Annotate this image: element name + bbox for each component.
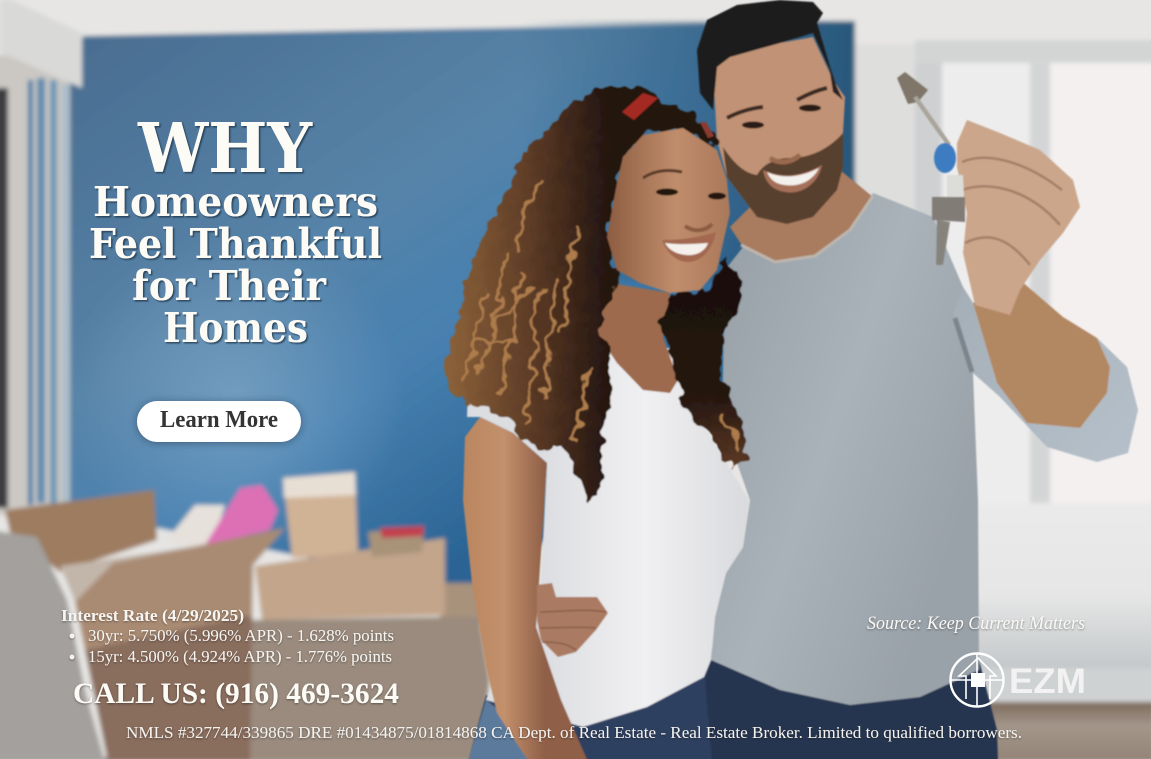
man hand on waist bbox=[537, 583, 608, 657]
woman shirt bbox=[467, 340, 749, 727]
open box inside bbox=[60, 545, 205, 602]
man forearm bbox=[973, 280, 1110, 428]
open box flap bbox=[75, 528, 285, 759]
red band right end bbox=[700, 122, 714, 138]
man bbox=[697, 0, 1138, 759]
man hair bbox=[697, 0, 833, 110]
man face bbox=[713, 37, 845, 223]
button label: Learn More bbox=[160, 407, 278, 433]
man collar bbox=[741, 196, 873, 262]
sofa surface bbox=[100, 617, 490, 759]
man sleeve bbox=[953, 287, 1138, 462]
man teeth bbox=[767, 168, 819, 185]
interest rate block bbox=[61, 606, 394, 666]
source credit: Source: Keep Current Matters bbox=[867, 614, 1085, 634]
man eyes and brows bbox=[727, 88, 827, 128]
woman eyes and brows bbox=[643, 170, 726, 200]
headline line 2: Feel Thankful bbox=[89, 220, 382, 268]
man mouth bbox=[763, 165, 822, 193]
rear cardboard box bbox=[5, 490, 157, 572]
woman arm bbox=[463, 417, 588, 759]
headline line 4: Homes bbox=[163, 304, 308, 352]
moving boxes bbox=[0, 472, 490, 759]
floor behind boxes bbox=[440, 583, 490, 623]
wall light glow bbox=[65, 230, 405, 570]
bullet 30 year bbox=[70, 634, 74, 638]
blue wall bbox=[68, 21, 855, 592]
man side hair bbox=[828, 60, 843, 100]
headline word why: WHY bbox=[137, 109, 313, 189]
rate 15 year: 15yr: 4.500% (4.924% APR) - 1.776% points bbox=[88, 647, 392, 666]
woman nose shadow bbox=[685, 224, 712, 230]
wall shade at upper right bbox=[520, 21, 855, 281]
rate 30 year: 30yr: 5.750% (5.996% APR) - 1.628% points bbox=[88, 626, 394, 645]
logo house icon bbox=[950, 654, 1004, 706]
man sweater bbox=[711, 193, 979, 705]
woman jeans light side bbox=[468, 700, 530, 759]
woman mouth bbox=[662, 232, 716, 262]
woman face bbox=[607, 128, 730, 293]
EZM logo bbox=[950, 654, 1086, 706]
red lids bbox=[380, 526, 424, 538]
sleeve fold shadow bbox=[955, 318, 972, 372]
white item bbox=[165, 505, 225, 548]
open box front shade bbox=[85, 615, 252, 759]
left window and curtain bbox=[0, 55, 70, 515]
man neck bbox=[730, 170, 873, 263]
phone call to action: CALL US: (916) 469-3624 bbox=[73, 678, 399, 710]
stacked small box bbox=[283, 472, 358, 558]
man beard bbox=[723, 133, 843, 224]
headline line 1: Homeowners bbox=[93, 178, 378, 226]
cans on box bbox=[368, 527, 424, 557]
legal disclaimer: NMLS #327744/339865 DRE #01434875/01814868 CA Dept. of Real Estate - Real Estate Broker. Limited to qualified borrowers. bbox=[126, 723, 1022, 742]
bullet 15 year bbox=[70, 655, 74, 659]
woman bbox=[445, 87, 749, 759]
man jeans bbox=[700, 650, 998, 759]
hand finger creases bbox=[540, 610, 606, 650]
man hand bbox=[957, 120, 1080, 315]
right wall and window bbox=[855, 40, 1151, 759]
man nose shadow bbox=[770, 155, 800, 162]
couple photo bbox=[445, 0, 1138, 759]
woman right hair bbox=[660, 257, 748, 468]
woman jeans bbox=[468, 670, 712, 759]
learn more button bbox=[137, 401, 301, 442]
headline bbox=[89, 109, 382, 352]
red hair band bbox=[622, 93, 658, 120]
woman teeth bbox=[665, 243, 708, 255]
pink tube bbox=[205, 485, 278, 545]
woman left hair bbox=[445, 87, 717, 500]
woman neck bbox=[597, 283, 678, 393]
headline line 3: for Their bbox=[132, 262, 327, 310]
grey flap foreground bbox=[0, 530, 105, 759]
lower box bbox=[255, 538, 445, 620]
finger creases bbox=[962, 158, 1062, 265]
logo wordmark: EZM bbox=[1009, 662, 1086, 701]
interest rate heading: Interest Rate (4/29/2025) bbox=[61, 606, 244, 625]
left ceiling soffit bbox=[0, 0, 82, 88]
keys bbox=[897, 72, 965, 265]
small box top bbox=[283, 472, 356, 498]
woman curl highlights bbox=[462, 180, 740, 452]
